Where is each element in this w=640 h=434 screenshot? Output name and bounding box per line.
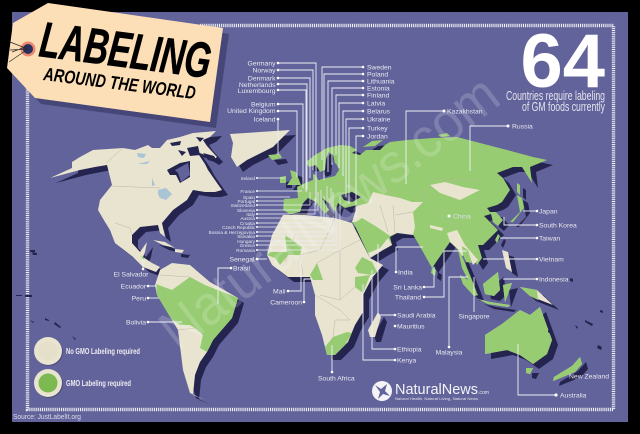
label: Spain: Spain [243, 195, 255, 200]
Hudson Bay [167, 161, 190, 183]
label: South Africa: South Africa [318, 376, 355, 382]
label: Slovakia: Slovakia [237, 234, 255, 239]
label: Malaysia: Malaysia [436, 350, 463, 356]
legend item: GMO labeling: GMO Labeling required [66, 379, 131, 388]
label: South Korea: South Korea [539, 222, 577, 230]
label: Ethiopia: Ethiopia [397, 346, 422, 354]
label: Finland: Finland [367, 92, 390, 100]
Black Sea and Caspian Sea [341, 192, 361, 202]
label: Finland [336, 92, 390, 155]
Yemen and Oman [368, 238, 392, 258]
labels: northern and eastern Europe right group [322, 64, 395, 218]
label: Jordan [356, 134, 388, 218]
label: Iceland [254, 116, 279, 155]
labels: Asia [378, 108, 577, 356]
label: Portugal: Portugal [238, 199, 255, 204]
label: Latvia [339, 100, 385, 168]
labels: Americas [114, 259, 250, 326]
label: Japan [523, 208, 558, 216]
label: Belgium [251, 102, 303, 188]
green countries: Oceania and Indonesia [460, 272, 582, 381]
label: Bosnia & Herzegovina: Bosnia & Herzegovina [209, 230, 255, 235]
label: Ukraine [346, 116, 391, 197]
legend item: no GMO labeling: No GMO Labeling required [66, 347, 140, 356]
label: Singapore [458, 277, 490, 320]
label: Italy: Italy [246, 212, 256, 217]
label: Estonia: Estonia [367, 86, 390, 92]
label: Belarus: Belarus [367, 108, 391, 116]
label: Poland: Poland [367, 72, 388, 78]
label: Belarus [343, 108, 391, 176]
label: Bolivia: Bolivia [126, 320, 146, 326]
label: Brasil: Brasil [233, 266, 250, 272]
label: Luxembourg [238, 88, 306, 192]
label: Germany: Germany [248, 60, 276, 68]
label: Vietnam [483, 256, 564, 264]
heading: AROUND THE WORLD: AROUND THE WORLD [42, 63, 197, 103]
icon: globe [372, 381, 392, 401]
label: Sweden: Sweden [367, 64, 392, 72]
label: Switzerland: Switzerland [231, 203, 255, 208]
label: United Kingdom [227, 108, 297, 177]
label: New Zealand: New Zealand [569, 374, 609, 380]
label: Turkey: Turkey [367, 126, 388, 132]
world map [16, 130, 603, 405]
country borders [106, 148, 480, 337]
label: Ukraine: Ukraine [367, 116, 391, 124]
label: Lithuania: Lithuania [367, 78, 395, 86]
label: Latvia: Latvia [367, 100, 385, 108]
label: South Korea [504, 217, 577, 230]
labels: Africa [230, 254, 425, 382]
Natural News logo: NaturalNews [395, 381, 478, 398]
label: Malaysia [436, 277, 468, 356]
label: India: India [398, 270, 413, 276]
label: Thailand: Thailand [395, 294, 421, 302]
label: Estonia [332, 86, 390, 165]
label: Thailand [395, 251, 467, 302]
label: Singapore: Singapore [458, 314, 490, 320]
label: Germany [248, 60, 316, 205]
label: Kazakhstan [406, 108, 483, 184]
label: Sri Lanka: Sri Lanka [393, 284, 422, 292]
label: China: China [453, 214, 471, 220]
label: Romania: Romania [236, 248, 255, 253]
label: Kenya [363, 284, 416, 364]
label: Ethiopia [372, 270, 422, 354]
label: Greece: Greece [240, 243, 255, 248]
label: United Kingdom: United Kingdom [227, 108, 276, 115]
label: Mauritius: Mauritius [397, 324, 425, 330]
Natural News logo: Natural Health, Natural Living, Natural News [395, 397, 478, 401]
label: Jordan: Jordan [367, 134, 388, 140]
label: Norway: Norway [252, 68, 276, 74]
Arctic channels [170, 137, 218, 163]
label: Austria: Austria [240, 216, 255, 221]
green countries: Africa [267, 235, 377, 355]
label: Senegal: Senegal [230, 256, 255, 264]
legend [34, 337, 140, 398]
luggage tag title [7, 3, 229, 128]
label: Iceland: Iceland [254, 116, 276, 124]
Great Lakes [137, 153, 172, 200]
label: Poland [324, 72, 388, 180]
label: Czech Republic: Czech Republic [222, 225, 256, 230]
label: Sri Lanka [393, 267, 434, 292]
label: Croatia: Croatia [240, 221, 255, 226]
label: Indonesia: Indonesia [539, 276, 569, 284]
label: Netherlands [239, 82, 307, 190]
label: Hungary: Hungary [237, 239, 256, 244]
heading: LABELING: LABELING [37, 11, 214, 89]
label: Peru: Peru [132, 296, 146, 302]
Natural News logo [372, 381, 489, 401]
label: Turkey [349, 126, 388, 204]
labels: western and southern Europe list [209, 176, 340, 253]
label: Cameroon: Cameroon [270, 300, 302, 306]
label: Luxembourg: Luxembourg [238, 88, 276, 95]
statistic: 64 countries: 64 [520, 19, 605, 104]
Pacific islands [16, 250, 603, 350]
label: Tunisia: Tunisia [300, 215, 315, 220]
labels: northern Europe left group [227, 60, 316, 205]
label: Lithuania [328, 78, 395, 172]
label: Taiwan [500, 236, 560, 242]
label: Taiwan: Taiwan [539, 236, 560, 242]
label: El Salvador: El Salvador [114, 272, 149, 278]
label: Denmark: Denmark [248, 76, 276, 82]
label: Norway [252, 68, 313, 170]
label: Mali [273, 254, 301, 296]
label: Saudi Arabia [378, 244, 436, 320]
label: Russia [470, 124, 533, 171]
label: Indonesia [503, 276, 569, 284]
label: Denmark [248, 76, 310, 178]
Mongolia [430, 182, 480, 200]
label: Kenya: Kenya [397, 358, 416, 364]
label: Belgium: Belgium [251, 102, 276, 108]
label: Russia: Russia [512, 124, 533, 130]
label: South Africa [318, 345, 355, 382]
source: Source: JustLabelIt.org [13, 414, 81, 421]
green countries: Europe and Asia [268, 133, 547, 293]
label: Vietnam: Vietnam [539, 256, 564, 264]
label: Ireland: Ireland [241, 176, 255, 181]
green countries: Thailand [462, 246, 472, 263]
Southeast Asia mainland [447, 230, 478, 265]
label: France: France [240, 189, 255, 194]
label: Slovenia: Slovenia [237, 208, 255, 213]
label: Australia: Australia [560, 392, 587, 400]
label: Sweden [322, 64, 392, 160]
Middle East and Central Asia [352, 192, 443, 236]
label: Cameroon [270, 279, 312, 306]
green countries: El Salvador [141, 256, 145, 260]
label: Ecuador: Ecuador [121, 284, 147, 290]
tag eyelet and string [9, 42, 36, 62]
green countries: South America [156, 277, 238, 352]
label: Mali: Mali [273, 288, 286, 296]
label: Kazakhstan: Kazakhstan [447, 108, 483, 116]
watermark: NaturalNews.com [147, 62, 511, 362]
Natural News logo: .com [478, 390, 489, 396]
label: Saudi Arabia: Saudi Arabia [397, 312, 436, 320]
label: Netherlands: Netherlands [239, 82, 276, 89]
label: Japan: Japan [539, 208, 558, 216]
labels: Oceania [518, 344, 609, 400]
label: India [395, 247, 423, 276]
label: Senegal [230, 256, 267, 264]
